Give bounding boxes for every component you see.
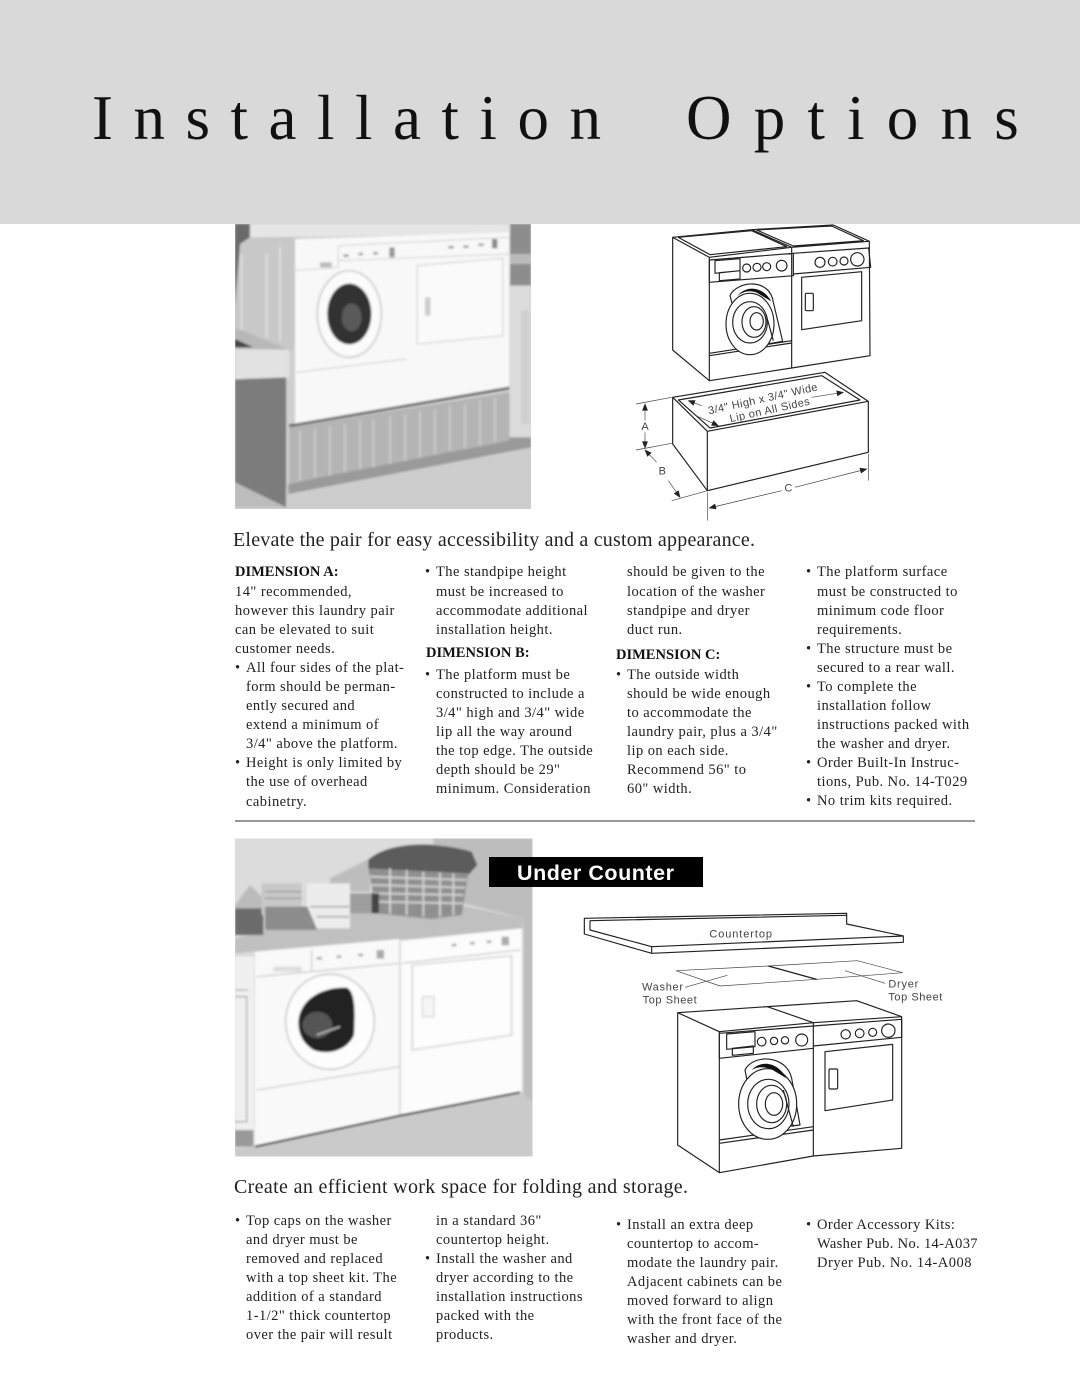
text column: platform surface notes: • — [806, 679, 812, 695]
text column: extra deep countertop — [616, 1217, 782, 1347]
text column: platform surface notes: No trim kits required. — [817, 793, 953, 809]
text column: platform surface notes: The platform surface — [817, 564, 948, 580]
text column: duct run and Dimension C: duct run. — [627, 622, 683, 638]
text column: Dimension A: 3/4" above the platform. — [246, 736, 398, 752]
text column: accessory kits: Washer Pub. No. 14-A037 — [817, 1236, 978, 1252]
text column: duct run and Dimension C: • — [616, 667, 622, 683]
text column: duct run and Dimension C — [616, 564, 778, 797]
text column: accessory kits: Dryer Pub. No. 14-A008 — [817, 1255, 972, 1271]
text column: Dimension A: • — [235, 755, 241, 771]
text column: platform surface notes: minimum code floor — [817, 603, 944, 619]
text column: duct run and Dimension C: 60" width. — [627, 781, 692, 797]
text column: standard height: countertop height. — [436, 1232, 550, 1248]
text column: duct run and Dimension C: laundry pair, plus a 3/4" — [627, 724, 778, 740]
photo: washer and dryer under counter — [235, 838, 533, 1157]
icon: washer and dryer drawing — [678, 1001, 902, 1173]
text column: platform surface notes — [806, 564, 970, 809]
banner: Under Counter — [489, 857, 703, 887]
text column: extra deep countertop: • — [616, 1217, 622, 1233]
title: Options — [686, 83, 1041, 153]
text column: duct run and Dimension C: should be given to the — [627, 564, 765, 580]
label: washer top sheet: Top Sheet — [643, 994, 697, 1006]
heading: Dimension A: DIMENSION A: — [235, 564, 339, 580]
text column: Dimension A: the use of overhead — [246, 774, 368, 790]
text column: top caps: • — [235, 1213, 241, 1229]
dimension A, B and C arrows: C — [784, 483, 792, 495]
heading: elevate the pair: Elevate the pair for easy accessibility and a custom appearance. — [233, 529, 755, 551]
text column: extra deep countertop: with the front face of the — [627, 1312, 782, 1328]
text column: platform surface notes: The structure must be — [817, 641, 952, 657]
text column: platform surface notes: secured to a rear wall. — [817, 660, 955, 676]
text column: standpipe and Dimension B: 3/4" high and 3/4" wide — [436, 705, 585, 721]
heading: create an efficient work space: Create an efficient work space for folding and storage. — [234, 1176, 688, 1198]
text column: Dimension A: • — [235, 660, 241, 676]
text column: top caps: addition of a standard — [246, 1289, 382, 1305]
icon: countertop — [584, 913, 903, 953]
text column: Dimension A: customer needs. — [235, 641, 335, 657]
label: dryer top sheet — [888, 979, 942, 1003]
platform lip label: Lip on All Sides — [729, 396, 811, 425]
label: dryer top sheet: Dryer — [888, 979, 919, 991]
text column: standpipe and Dimension B: installation height. — [436, 622, 553, 638]
heading: Dimension C: DIMENSION C: — [616, 647, 720, 663]
line art: countertop, top sheets, washer and dryer — [584, 913, 942, 1173]
text column: duct run and Dimension C: should be wide enough — [627, 686, 771, 702]
text column: platform surface notes: • — [806, 564, 812, 580]
text column: extra deep countertop: countertop to accom- — [627, 1236, 759, 1252]
text column: standard height: products. — [436, 1327, 494, 1343]
heading: Dimension B: DIMENSION B: — [426, 645, 530, 661]
title: Installation — [92, 83, 621, 153]
label: washer top sheet — [642, 982, 697, 1006]
text column: Dimension A: Height is only limited by — [246, 755, 403, 771]
text column: extra deep countertop: moved forward to align — [627, 1293, 774, 1309]
text column: standpipe and Dimension B: accommodate additional — [436, 603, 588, 619]
text column: duct run and Dimension C: lip on each side. — [627, 743, 729, 759]
text column: extra deep countertop: Adjacent cabinets can be — [627, 1274, 782, 1290]
text column: Dimension A: 14" recommended, — [235, 584, 352, 600]
text column: standard height: Install the washer and — [436, 1251, 573, 1267]
text column: platform surface notes: • — [806, 755, 812, 771]
text column: platform surface notes: • — [806, 793, 812, 809]
text column: extra deep countertop: modate the laundry pair. — [627, 1255, 779, 1271]
header band with title — [0, 0, 1080, 224]
photo: washer and dryer on raised platform — [235, 224, 531, 509]
line art: washer and dryer above platform with dimensions A, B, C — [636, 225, 871, 521]
banner: Under Counter: Under Counter — [517, 861, 675, 885]
text column: Dimension A: extend a minimum of — [246, 717, 379, 733]
dimension A, B and C arrows: A — [641, 421, 649, 433]
text column: top caps: removed and replaced — [246, 1251, 383, 1267]
label: dryer top sheet: Top Sheet — [888, 991, 942, 1003]
text column: standpipe and Dimension B — [425, 564, 593, 797]
text column: standpipe and Dimension B: • — [425, 667, 431, 683]
text column: top caps: Top caps on the washer — [246, 1213, 392, 1229]
text column: duct run and Dimension C: Recommend 56" to — [627, 762, 746, 778]
text column: Dimension A: however this laundry pair — [235, 603, 395, 619]
text column: accessory kits — [806, 1217, 978, 1271]
text column: top caps: and dryer must be — [246, 1232, 358, 1248]
text column: standpipe and Dimension B: • — [425, 564, 431, 580]
text column: Dimension A: can be elevated to suit — [235, 622, 374, 638]
text column: extra deep countertop: Install an extra deep — [627, 1217, 754, 1233]
text column: standard height — [425, 1213, 583, 1343]
text column: standard height: packed with the — [436, 1308, 535, 1324]
dimension A, B and C arrows — [636, 397, 868, 521]
text column: standpipe and Dimension B: depth should be 29" — [436, 762, 560, 778]
text column: platform surface notes: • — [806, 641, 812, 657]
icon: top sheets — [642, 961, 942, 1006]
text column: platform surface notes: the washer and dryer. — [817, 736, 950, 752]
text column: platform surface notes: tions, Pub. No. 14-T029 — [817, 774, 968, 790]
text column: duct run and Dimension C: location of the washer — [627, 584, 765, 600]
text column: platform surface notes: must be constructed to — [817, 584, 958, 600]
platform lip label: 3/4" High x 3/4" Wide — [707, 381, 819, 417]
text column: Dimension A: ently secured and — [246, 698, 355, 714]
text column: standpipe and Dimension B: minimum. Consideration — [436, 781, 591, 797]
text column: standard height: dryer according to the — [436, 1270, 574, 1286]
text column: standard height: in a standard 36" — [436, 1213, 542, 1229]
text column: platform surface notes: To complete the — [817, 679, 917, 695]
icon: washer and dryer drawing — [673, 225, 871, 381]
text column: standpipe and Dimension B: must be increased to — [436, 584, 564, 600]
text column: standpipe and Dimension B: The platform must be — [436, 667, 570, 683]
text column: top caps — [235, 1213, 397, 1343]
text column: Dimension A: form should be perman- — [246, 679, 396, 695]
text column: standpipe and Dimension B: the top edge. The outside — [436, 743, 593, 759]
text column: accessory kits: • — [806, 1217, 812, 1233]
text column: top caps: with a top sheet kit. The — [246, 1270, 397, 1286]
dimension A, B and C arrows: B — [659, 466, 666, 478]
text column: standpipe and Dimension B: The standpipe height — [436, 564, 567, 580]
icon: platform with lip — [673, 372, 868, 491]
text column: platform surface notes: Order Built-In Instruc- — [817, 755, 959, 771]
text column: Dimension A: All four sides of the plat- — [246, 660, 404, 676]
text column: Dimension A — [235, 564, 404, 810]
text column: standpipe and Dimension B: lip all the way around — [436, 724, 573, 740]
text column: standard height: installation instructions — [436, 1289, 583, 1305]
text column: platform surface notes: requirements. — [817, 622, 902, 638]
text column: duct run and Dimension C: The outside width — [627, 667, 740, 683]
text column: standard height: • — [425, 1251, 431, 1267]
text column: duct run and Dimension C: to accommodate the — [627, 705, 752, 721]
text column: top caps: over the pair will result — [246, 1327, 393, 1343]
text column: platform surface notes: installation follow — [817, 698, 932, 714]
text column: standpipe and Dimension B: constructed to include a — [436, 686, 585, 702]
text column: top caps: 1-1/2" thick countertop — [246, 1308, 391, 1324]
text column: accessory kits: Order Accessory Kits: — [817, 1217, 955, 1233]
text column: duct run and Dimension C: standpipe and dryer — [627, 603, 750, 619]
text column: extra deep countertop: washer and dryer. — [627, 1331, 737, 1347]
label: washer top sheet: Washer — [642, 982, 683, 994]
text column: Dimension A: cabinetry. — [246, 794, 307, 810]
title — [92, 83, 1041, 153]
icon: countertop: Countertop — [709, 928, 772, 940]
text column: platform surface notes: instructions packed with — [817, 717, 970, 733]
